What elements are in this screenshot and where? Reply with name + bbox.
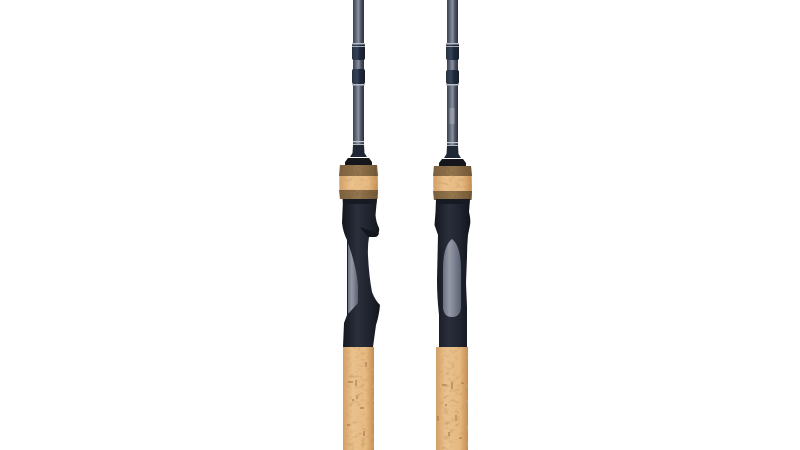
right rod shaft <box>447 0 458 145</box>
left rod reel seat bands <box>352 43 365 145</box>
left rod fore cork <box>339 165 378 199</box>
right rod collar <box>444 146 461 158</box>
right rod logo mark <box>450 108 454 124</box>
right rod black grip <box>434 199 470 347</box>
left rod black grip <box>342 199 380 347</box>
left rod hook highlight <box>360 227 379 237</box>
left rod dark cork bands <box>339 165 378 199</box>
right rod disk <box>439 159 466 166</box>
right rod reel seat bands <box>446 43 459 146</box>
left rod grip shading <box>342 199 377 204</box>
right rod <box>433 0 472 450</box>
left rod rear cork handle <box>343 347 374 450</box>
right rod grip shading <box>436 199 470 204</box>
right rod dark cork bands <box>433 166 472 200</box>
left rod shaft <box>353 0 364 145</box>
left rod collar <box>350 145 367 157</box>
left rod <box>339 0 380 450</box>
right rod rear cork handle <box>436 347 468 450</box>
right rod gray inlay <box>443 239 461 317</box>
right rod fore cork <box>433 166 472 200</box>
left rod disk <box>345 158 372 165</box>
left rod gray inlay <box>348 243 358 313</box>
